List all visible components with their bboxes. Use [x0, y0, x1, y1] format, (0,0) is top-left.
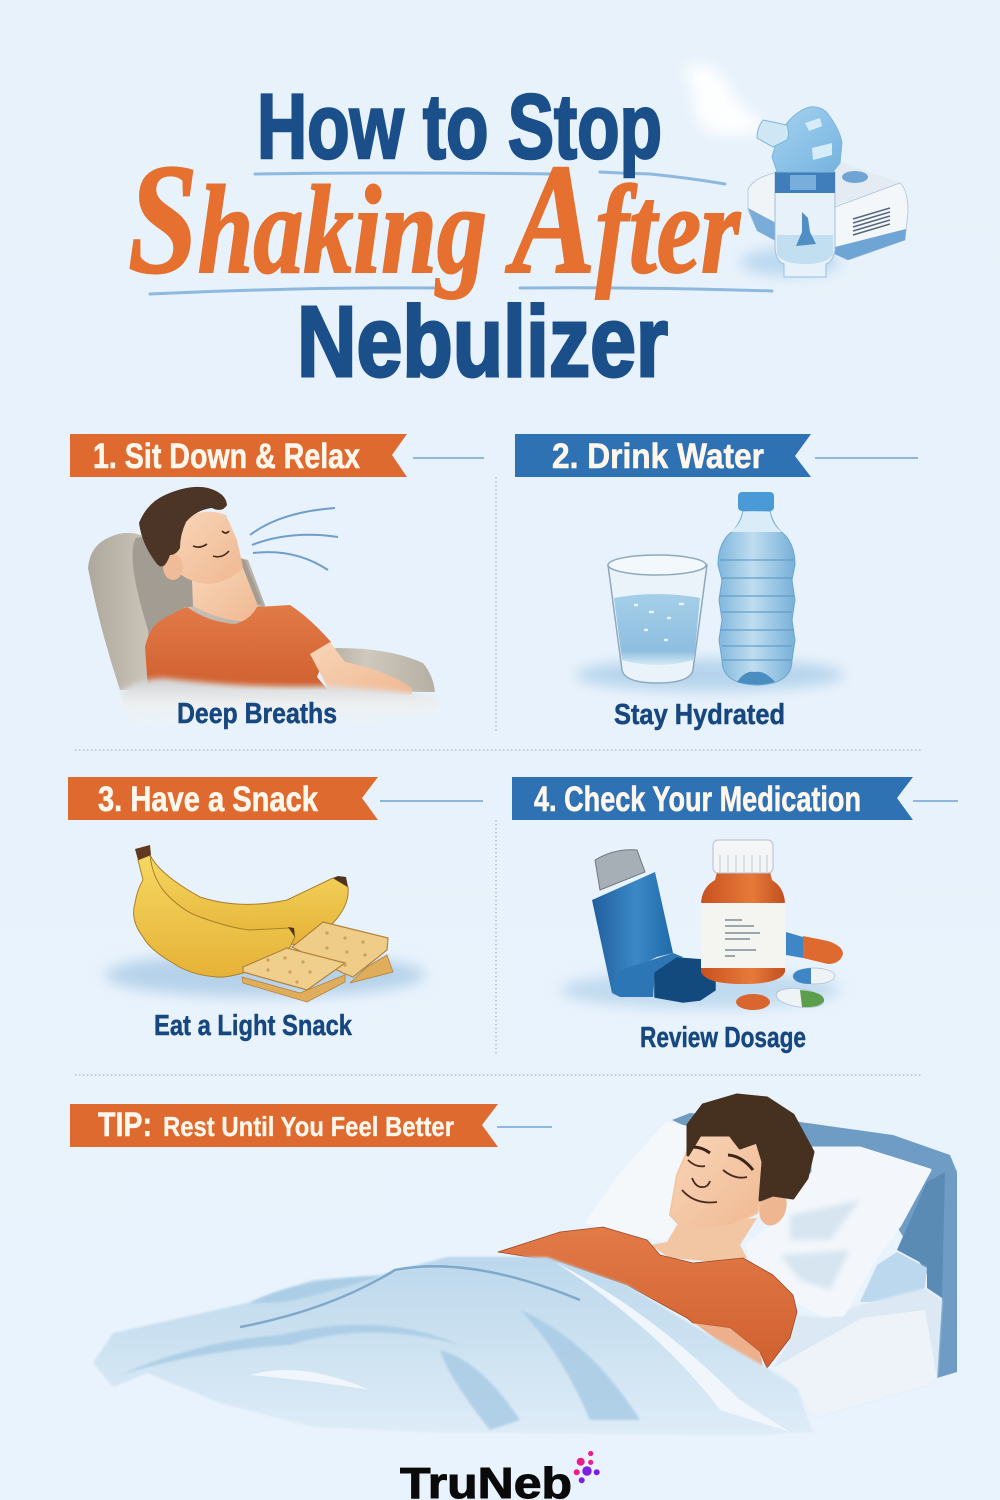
icon: nebulizer machine with mist	[686, 64, 908, 277]
illustration: man resting in bed	[93, 1095, 957, 1435]
machine right blue band	[835, 229, 906, 260]
cap ridges	[720, 855, 767, 872]
bottle ridges	[720, 560, 794, 660]
bottle label	[701, 903, 785, 968]
vent	[853, 208, 890, 235]
banner: step 4: 4. Check Your Medication	[534, 780, 861, 819]
banana stem	[135, 845, 151, 860]
mist	[686, 64, 765, 135]
machine button	[842, 171, 868, 183]
mattress front	[773, 1310, 937, 1418]
divider row 2	[75, 820, 922, 1075]
pill green-white	[775, 986, 825, 1010]
logo: TruNeb	[400, 1451, 600, 1500]
divider row 1	[75, 477, 922, 750]
bubbles	[635, 604, 683, 640]
headboard	[672, 1113, 957, 1378]
machine right face	[835, 183, 908, 260]
ear	[755, 1187, 791, 1229]
inhaler body	[592, 872, 673, 993]
mattress sheet	[773, 1288, 942, 1418]
title line: Shaking After: Shaking After	[128, 132, 741, 307]
cracker back	[292, 922, 388, 977]
bottle cap	[738, 492, 774, 511]
breath lines	[250, 508, 338, 570]
arm	[693, 1323, 763, 1367]
mouthpiece dome	[772, 107, 842, 172]
pill blue-white	[793, 968, 835, 984]
ear	[163, 554, 183, 580]
blanket	[93, 1257, 813, 1435]
banner: step 3: 3. Have a Snack	[98, 780, 318, 819]
back banana	[150, 855, 348, 945]
shadow	[575, 659, 845, 691]
illustration: bananas and crackers	[105, 845, 425, 1002]
cup	[775, 172, 835, 277]
inhaler mouthpiece	[655, 958, 715, 1002]
headboard inner	[897, 1172, 945, 1298]
illustration: water glass and bottle	[575, 492, 845, 691]
inhaler lower	[612, 953, 683, 997]
title underline 2	[150, 288, 772, 294]
cracker holes	[266, 931, 367, 984]
machine left face	[748, 172, 778, 242]
banner: step 3	[68, 777, 483, 820]
shadow	[560, 972, 840, 1008]
pillow right	[747, 1148, 930, 1315]
banner: step 1: 1. Sit Down & Relax	[93, 437, 360, 476]
floor shadow	[740, 248, 840, 276]
blanket fold patches	[120, 1276, 640, 1430]
cracker back stack	[350, 955, 393, 983]
label lines	[725, 920, 760, 956]
blurred blanket at chair base	[120, 678, 438, 726]
blanket top crease	[240, 1266, 580, 1327]
illustration: inhaler, pill bottle and pills	[560, 840, 843, 1010]
closed eyes, brows, nose and mouth	[682, 1160, 747, 1202]
bottle base sediment	[737, 672, 775, 684]
title line: Nebulizer: Nebulizer	[297, 286, 668, 398]
title	[128, 76, 772, 398]
caption: stay hydrated: Stay Hydrated	[614, 699, 785, 731]
title line: How to Stop: How to Stop	[257, 76, 662, 178]
title underline 1	[255, 172, 725, 184]
hair	[139, 487, 227, 567]
front banana	[134, 855, 295, 977]
shirt	[145, 605, 331, 690]
cracker front base	[242, 975, 345, 1002]
banner: tip: Rest Until You Feel Better	[163, 1111, 454, 1142]
capsule orange-blue	[786, 932, 843, 964]
chair arm	[320, 648, 435, 692]
eyebrows	[693, 1147, 753, 1170]
neck	[192, 568, 258, 622]
glass rim	[608, 555, 706, 575]
shadow	[105, 953, 425, 997]
back pillow	[860, 1252, 927, 1302]
glass	[608, 565, 707, 683]
machine left blue band	[748, 208, 778, 242]
hair	[688, 1095, 813, 1200]
closed eyes and mouth	[193, 531, 229, 557]
pillow shading	[780, 1200, 860, 1290]
machine top	[836, 162, 902, 205]
water in glass	[614, 594, 700, 665]
neck	[650, 1218, 757, 1262]
banner: tip	[70, 1104, 552, 1147]
shirt	[498, 1227, 797, 1368]
banner: tip: TIP:	[98, 1106, 152, 1144]
caption: review dosage: Review Dosage	[640, 1022, 806, 1054]
banner: step 2: 2. Drink Water	[552, 437, 764, 476]
banana tips	[288, 876, 348, 937]
head	[170, 512, 243, 584]
pillow left	[587, 1123, 690, 1240]
blanket white highlights	[250, 1262, 790, 1432]
caption: deep breaths: Deep Breaths	[177, 698, 337, 730]
bottle neck highlight	[730, 512, 782, 532]
inhaler canister	[595, 850, 645, 890]
pill bottle	[701, 872, 785, 984]
caption: eat a light snack: Eat a Light Snack	[154, 1010, 353, 1042]
banner: step 2	[515, 434, 918, 477]
chair back	[88, 533, 265, 690]
face	[670, 1135, 763, 1230]
bottle	[718, 510, 795, 685]
illustration: man relaxing in chair	[88, 487, 438, 726]
arm	[310, 642, 412, 695]
bottle cap	[713, 840, 773, 873]
cracker front	[243, 948, 345, 990]
pill orange	[736, 994, 770, 1010]
